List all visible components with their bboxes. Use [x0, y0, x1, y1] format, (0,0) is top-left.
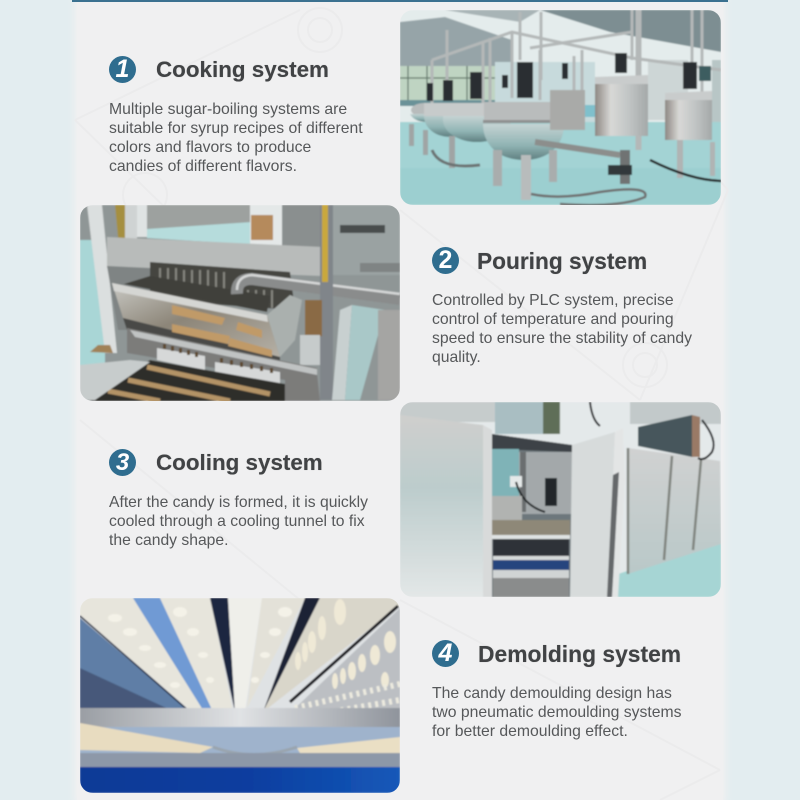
horizontal bands — [80, 708, 400, 728]
body text 1: candies of different flavors. — [109, 158, 297, 175]
block 4: demolding system — [432, 639, 682, 740]
photo: cooling tunnel — [400, 402, 721, 597]
body text 3: cooled through a cooling tunnel to fix — [109, 513, 365, 530]
heading 2: Pouring system — [477, 248, 647, 274]
body text 3 — [109, 494, 368, 549]
badge 1 — [109, 56, 136, 83]
body text 2: quality. — [432, 349, 481, 366]
body text 3: After the candy is formed, it is quickly — [109, 494, 368, 511]
body text 4: for better demoulding effect. — [432, 723, 628, 740]
photo: demolding system — [80, 598, 400, 793]
body text 2: speed to ensure the stability of candy — [432, 330, 692, 347]
body text 1: Multiple sugar-boiling systems are — [109, 101, 347, 118]
body text 2: control of temperature and pouring — [432, 311, 674, 328]
body text 2: Controlled by PLC system, precise — [432, 292, 674, 309]
badge 3 — [109, 449, 136, 476]
small kettles — [409, 103, 511, 168]
photo: cooking kettles and tanks — [400, 10, 721, 205]
pillar — [320, 205, 333, 400]
heading 3: Cooling system — [156, 450, 323, 475]
badge 4 — [432, 640, 459, 667]
heading 4: Demolding system — [478, 641, 681, 667]
hopper — [114, 290, 280, 358]
front kettle — [483, 102, 564, 200]
pipe — [237, 279, 400, 299]
column and yellow strip — [87, 205, 117, 353]
photo: pouring machine — [80, 205, 400, 401]
left panel — [400, 422, 484, 578]
interior — [492, 434, 572, 597]
body text 3: the candy shape. — [109, 532, 228, 549]
cabinets — [628, 448, 721, 574]
heading 1: Cooking system — [156, 57, 329, 82]
body text 1: suitable for syrup recipes of different — [109, 120, 363, 137]
body text 1: colors and flavors to produce — [109, 139, 311, 156]
floor — [615, 540, 721, 597]
block 2: pouring system — [432, 246, 692, 366]
condenser — [638, 415, 692, 457]
block 1: cooking system — [109, 55, 363, 175]
badge 2 — [432, 247, 459, 274]
conveyor — [90, 360, 285, 401]
body text 2 — [432, 292, 692, 366]
badge 2: 2 — [439, 246, 452, 274]
badge 4: 4 — [439, 639, 452, 667]
body text 4: The candy demoulding design has — [432, 685, 672, 702]
open door — [570, 432, 615, 597]
nozzle rail — [127, 328, 320, 401]
motors — [427, 53, 711, 101]
tall tanks — [550, 90, 585, 130]
top accent bar — [72, 0, 728, 2]
body text 1 — [109, 101, 363, 175]
body text 4 — [432, 685, 682, 740]
badge 3: 3 — [116, 449, 129, 476]
block 3: cooling system — [109, 449, 368, 549]
badge 1: 1 — [116, 55, 129, 83]
candy cavities — [295, 599, 396, 689]
body text 4: two pneumatic demoulding systems — [432, 704, 682, 721]
